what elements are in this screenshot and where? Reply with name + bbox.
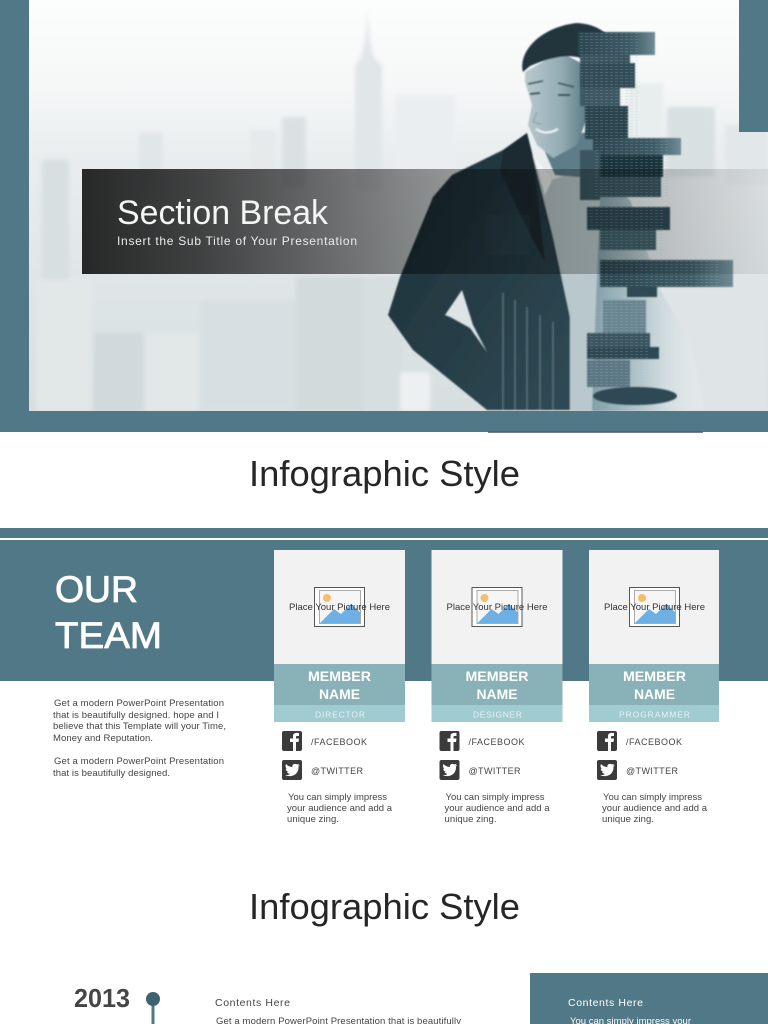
member name: MEMBER — [623, 668, 686, 684]
facebook handle: /FACEBOOK — [468, 737, 524, 747]
icon: facebook — [282, 731, 302, 751]
jacket — [388, 133, 570, 410]
member description — [444, 792, 550, 825]
twitter handle: @TWITTER — [468, 766, 521, 776]
neck — [544, 132, 594, 178]
hero photo: city skyline and businessman — [29, 0, 768, 411]
member name: NAME — [634, 686, 675, 702]
hero subtitle: Insert the Sub Title of Your Presentation — [117, 234, 357, 248]
picture placeholder — [274, 550, 405, 664]
panel: team member director — [274, 550, 405, 825]
timeline marker — [146, 992, 160, 1024]
text block: team introduction: Get a modern PowerPoint Presentation — [54, 698, 224, 709]
double exposure body haze — [591, 196, 673, 411]
panel: hero section break — [0, 0, 768, 433]
panel: contents callout: Contents Here — [568, 997, 643, 1009]
member name: MEMBER — [466, 668, 528, 684]
member role — [274, 705, 405, 722]
icon: facebook — [597, 731, 617, 751]
panel: contents callout — [530, 973, 768, 1024]
icon: twitter — [440, 760, 460, 780]
hero title: Section Break — [117, 194, 329, 232]
picture placeholder: Place Your Picture Here — [446, 602, 548, 613]
twitter handle: @TWITTER — [311, 766, 364, 776]
text block: timeline content: Contents Here — [215, 997, 290, 1009]
picture placeholder: Place Your Picture Here — [289, 602, 390, 613]
member role: DESIGNER — [473, 710, 522, 720]
top right accent block — [739, 0, 768, 132]
text block: team introduction: Money and Reputation. — [53, 733, 153, 744]
heading: infographic style one: Infographic Style — [249, 453, 520, 494]
text block: team introduction: that is beautifully designed. hope and I — [53, 710, 219, 721]
member name: NAME — [319, 686, 360, 702]
member role — [589, 705, 719, 722]
picture placeholder — [432, 550, 562, 664]
member name: NAME — [476, 686, 518, 702]
member name — [274, 664, 405, 705]
member name — [589, 664, 719, 705]
facebook handle: /FACEBOOK — [626, 737, 682, 747]
member description: your audience and add a — [602, 803, 708, 814]
facebook handle: /FACEBOOK — [311, 737, 367, 747]
member description: your audience and add a — [444, 803, 550, 814]
member name — [432, 664, 562, 705]
member name: MEMBER — [308, 668, 371, 684]
face — [525, 52, 590, 158]
text block: team introduction: that is beautifully designed. — [53, 768, 170, 779]
icon: twitter — [282, 760, 302, 780]
text block: team introduction: Get a modern PowerPoint Presentation — [54, 756, 224, 767]
panel: our team band — [0, 528, 768, 681]
member description: your audience and add a — [287, 803, 393, 814]
member description: unique zing. — [287, 814, 339, 825]
skyline window texture — [578, 32, 720, 387]
icon: twitter — [597, 760, 617, 780]
heading: our team: TEAM — [55, 615, 162, 656]
picture placeholder — [589, 550, 719, 664]
member description: You can simply impress — [603, 792, 702, 803]
member role: PROGRAMMER — [619, 710, 690, 720]
member role — [432, 705, 562, 722]
text block: timeline content — [215, 997, 461, 1024]
member description — [602, 792, 708, 825]
text block: team introduction — [53, 698, 226, 779]
hair — [522, 23, 620, 72]
heading: our team: OUR — [55, 569, 138, 610]
dark banner — [82, 169, 768, 274]
member description: You can simply impress — [446, 792, 545, 803]
heading: our team — [55, 569, 162, 656]
bottom band shadow line — [488, 432, 703, 433]
member description — [287, 792, 393, 825]
heading: infographic style two: Infographic Style — [249, 886, 520, 927]
picture placeholder: Place Your Picture Here — [604, 602, 705, 613]
brows, eyes, smile — [528, 81, 574, 87]
twitter handle: @TWITTER — [626, 766, 678, 776]
icon: facebook — [440, 731, 460, 751]
skyline double exposure — [578, 32, 733, 405]
year label: 2013 — [74, 983, 130, 1013]
member description: unique zing. — [602, 814, 654, 825]
member description: You can simply impress — [288, 792, 387, 803]
man in suit — [388, 23, 705, 411]
text block: team introduction: believe that this Template will your Time, — [53, 721, 226, 732]
member role: DIRECTOR — [315, 710, 365, 720]
member description: unique zing. — [444, 814, 496, 825]
panel: team member designer — [432, 550, 562, 825]
shirt — [533, 157, 600, 411]
panel: team member programmer — [589, 550, 719, 825]
